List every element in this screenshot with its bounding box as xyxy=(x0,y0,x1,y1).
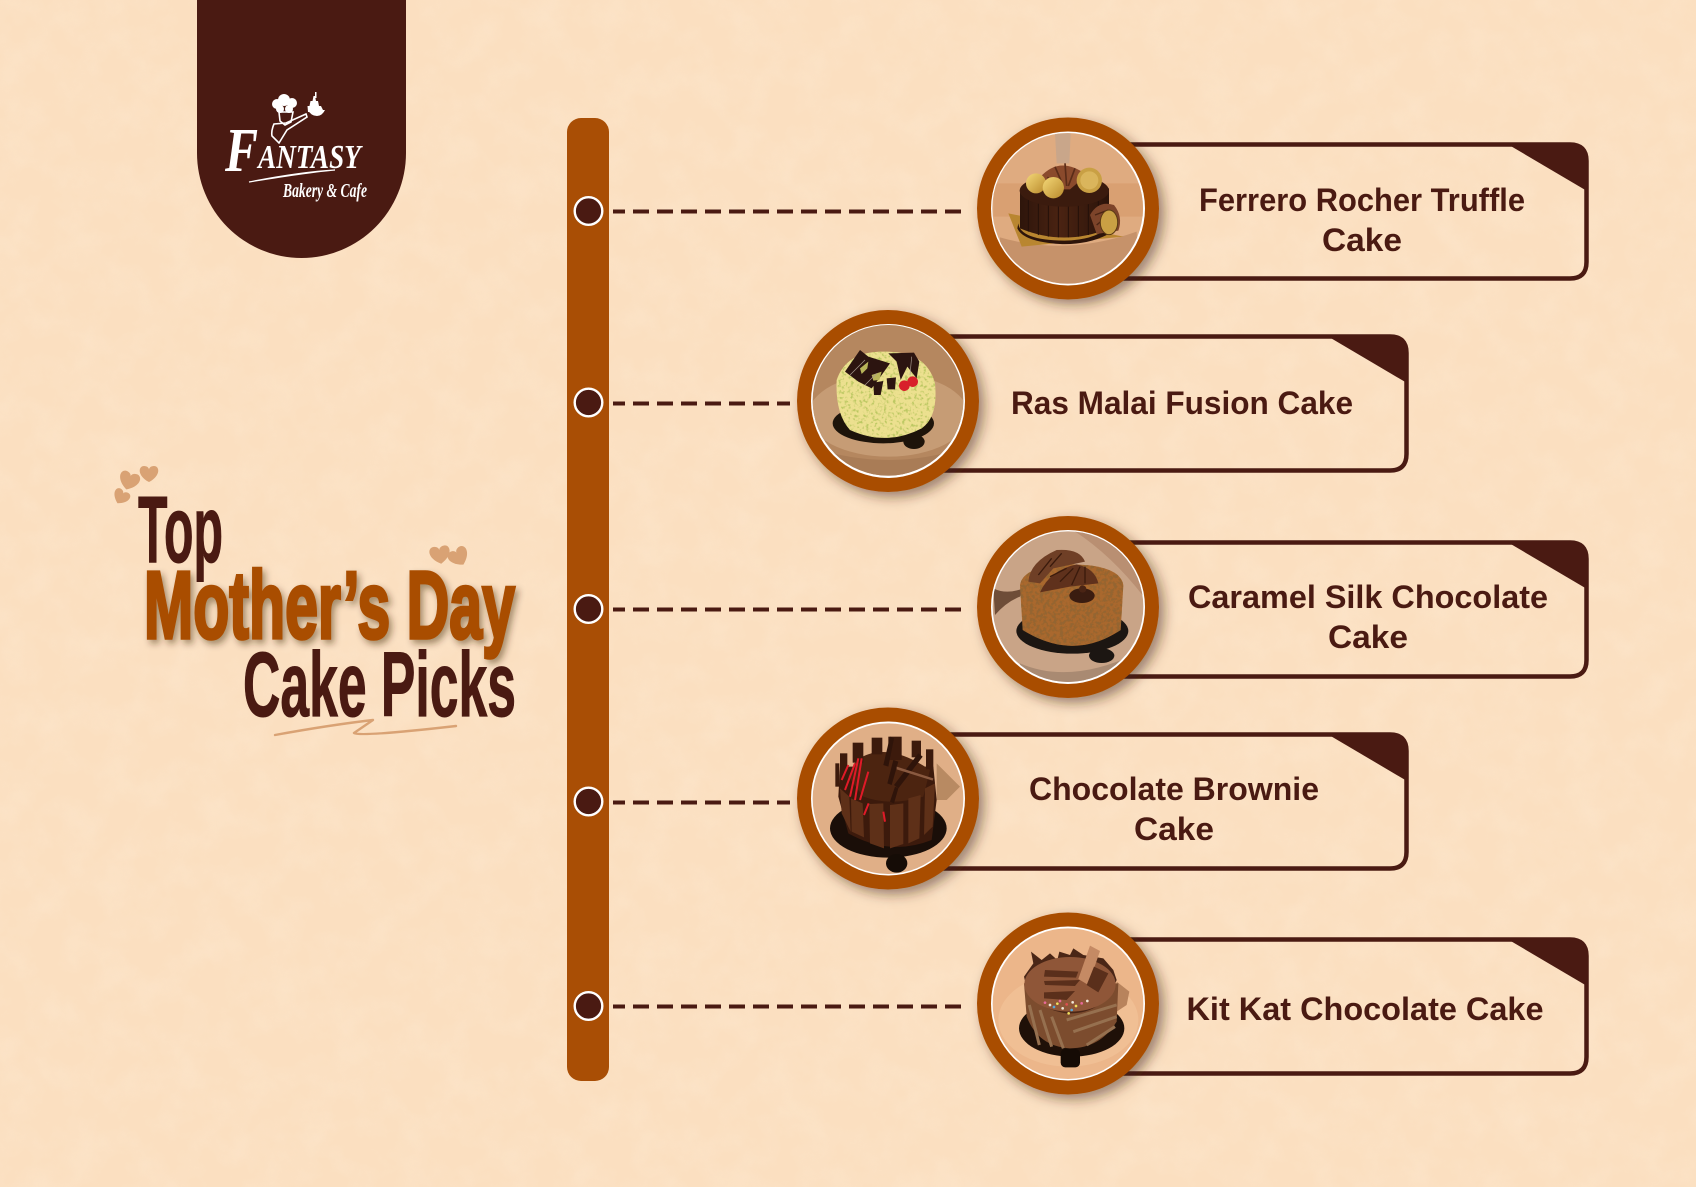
logo wordmark: Fantasy: ANTASY xyxy=(256,138,364,176)
label text: Cake xyxy=(1322,222,1402,258)
item 5: Kit Kat Chocolate Cake xyxy=(575,912,1587,1094)
item 3: Caramel Silk Chocolate Cake xyxy=(575,516,1587,698)
title line: Cake Picks: Cake Picks xyxy=(243,634,516,736)
timeline dot xyxy=(575,389,602,416)
cake photo circle xyxy=(797,708,979,890)
icon: hearts right xyxy=(429,544,472,570)
timeline dot xyxy=(575,595,602,623)
label card xyxy=(920,336,1407,470)
item 2: Ras Malai Fusion Cake xyxy=(575,310,1407,492)
title xyxy=(110,466,516,736)
cake photo circle xyxy=(977,912,1159,1094)
label card xyxy=(920,734,1407,868)
logo tagline: Bakery & Cafe xyxy=(282,180,367,202)
squiggle underline xyxy=(275,720,456,735)
item 1: Ferrero Rocher Truffle Cake xyxy=(575,118,1587,300)
connector dashes xyxy=(613,402,790,406)
connector dashes xyxy=(613,1004,962,1008)
title line: Mother's Day: Mother’s Day xyxy=(144,552,515,659)
item 4: Chocolate Brownie Cake xyxy=(575,708,1407,890)
label text: Kit Kat Chocolate Cake xyxy=(1186,991,1544,1027)
logo wordmark: Fantasy: F xyxy=(224,117,258,185)
timeline dot xyxy=(575,197,602,225)
connector dashes xyxy=(613,210,962,214)
label card xyxy=(1100,940,1587,1074)
logo banner xyxy=(197,0,406,258)
timeline bar xyxy=(567,118,609,1081)
icon: hearts left xyxy=(110,466,158,507)
icon: chef carrying a cake xyxy=(272,92,325,143)
label card xyxy=(1100,542,1587,676)
label text: Cake xyxy=(1328,619,1408,655)
logo swoosh xyxy=(249,170,335,182)
connector dashes xyxy=(613,800,790,804)
title line: Top: Top xyxy=(138,477,223,583)
timeline dot xyxy=(575,788,602,815)
label text: Cake xyxy=(1134,811,1214,847)
timeline dot xyxy=(575,992,602,1020)
label card xyxy=(1100,144,1587,278)
label text: Ferrero Rocher Truffle xyxy=(1199,182,1525,218)
cake photo circle xyxy=(797,310,979,492)
label text: Caramel Silk Chocolate xyxy=(1188,579,1548,615)
cake photo circle xyxy=(977,516,1159,698)
connector dashes xyxy=(613,608,962,612)
label text: Ras Malai Fusion Cake xyxy=(1011,385,1353,421)
label text: Chocolate Brownie xyxy=(1029,771,1319,807)
cake photo circle xyxy=(977,118,1159,300)
